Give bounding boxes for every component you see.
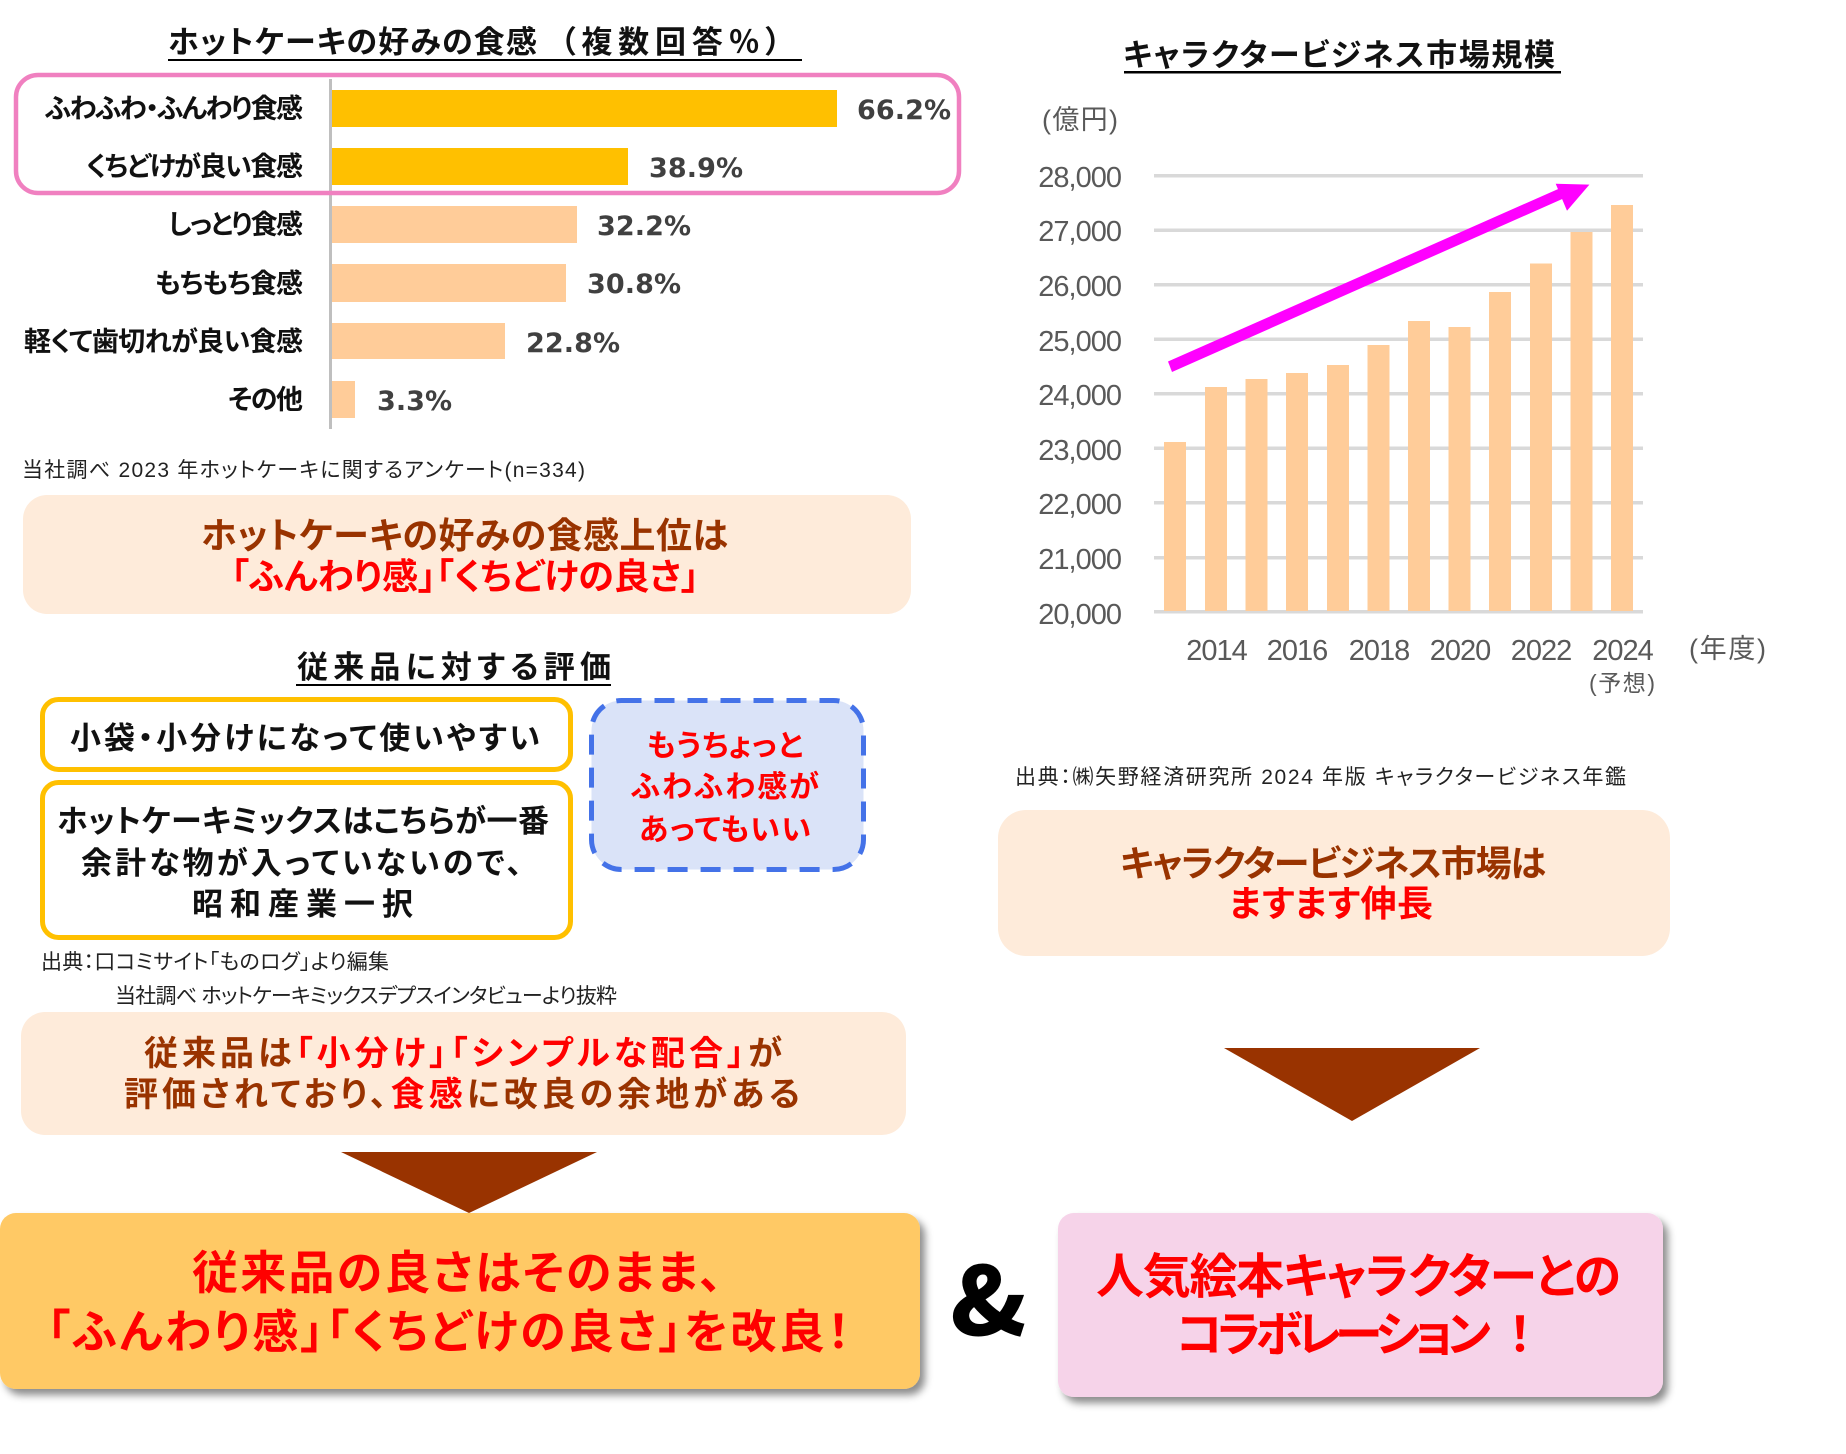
callout: top textures: 「ふんわり感」「くちどけの良さ」	[231, 556, 699, 597]
bar chart: market size by year: 22,000	[1038, 489, 1121, 521]
heading: texture preference	[168, 25, 802, 61]
bar chart: texture preference: 22.8%	[526, 328, 620, 359]
forecast note: (予想)	[1589, 670, 1655, 696]
dashed callout: want more fluffiness	[592, 700, 864, 870]
review box: simple ingredients	[42, 782, 570, 938]
bar chart: market size by year: 2020	[1430, 635, 1490, 667]
highlight frame: top two textures	[16, 75, 959, 193]
bar chart: market size by year: 20,000	[1038, 599, 1121, 631]
bar chart: texture preference: もちもち食感	[155, 269, 303, 299]
bar chart: market size by year: 2018	[1349, 635, 1409, 667]
bar chart: market size by year: 21,000	[1038, 544, 1121, 576]
ampersand: &	[951, 1227, 1025, 1361]
source note: survey: 当社調べ 2023 年ホットケーキに関するアンケート(n=334)	[22, 459, 585, 482]
callout: top textures: ホットケーキの好みの食感上位は	[201, 515, 728, 556]
bar chart: texture preference: 66.2%	[857, 95, 951, 126]
bar chart: market size by year: 2016	[1267, 635, 1327, 667]
bar chart: market size by year: 28,000	[1038, 162, 1121, 194]
bar chart: texture preference	[24, 79, 951, 429]
dashed callout: want more fluffiness: もうちょっと	[647, 730, 803, 763]
callout: market growing: ますます伸長	[1229, 883, 1433, 924]
y axis unit: (億円)	[1042, 105, 1118, 135]
callout: room for improvement: 評価されており、食感に改良の余地がある	[124, 1075, 800, 1114]
bar chart: texture preference: 38.9%	[649, 153, 743, 184]
bar chart: market size by year: 24,000	[1038, 380, 1121, 412]
conclusion box: character collaboration	[1058, 1213, 1663, 1397]
heading: texture preference: ホットケーキの好みの食感	[168, 25, 537, 60]
bar chart: texture preference: 30.8%	[587, 269, 681, 300]
bar chart: market size by year: 2014	[1186, 635, 1248, 667]
source note: reviews and interviews	[41, 951, 617, 1008]
callout: room for improvement: 従来品は「小分け」「シンプルな配合」が	[144, 1034, 782, 1073]
bar chart: market size by year: 27,000	[1038, 216, 1121, 248]
callout: top textures	[23, 495, 911, 614]
bar chart: market size by year: 26,000	[1038, 271, 1121, 303]
conclusion box: improve texture: 従来品の良さはそのまま、	[192, 1247, 722, 1299]
review box: simple ingredients: 昭和産業一択	[192, 887, 413, 922]
conclusion box: character collaboration: コラボレーション	[1176, 1309, 1491, 1362]
source note: reviews and interviews: 出典：口コミサイト「ものログ」より編集	[41, 951, 389, 974]
conclusion box: character collaboration: 人気絵本キャラクターとの	[1096, 1251, 1621, 1304]
callout: room for improvement	[21, 1012, 906, 1135]
dashed callout: want more fluffiness: あってもいい	[639, 814, 811, 847]
arrow: down left	[341, 1152, 597, 1213]
arrow: down right	[1224, 1048, 1480, 1121]
review box: simple ingredients: ホットケーキミックスはこちらが一番	[57, 804, 549, 839]
bar chart: texture preference: その他	[228, 385, 303, 415]
panel: evaluation of existing products	[0, 650, 920, 1389]
x axis unit: (年度)	[1689, 634, 1766, 664]
bar chart: texture preference: ふわふわ・ふんわり食感	[44, 94, 303, 124]
callout: market growing	[998, 810, 1670, 956]
conclusion box: improve texture: 「ふんわり感」「くちどけの良さ」を改良！	[47, 1306, 850, 1358]
source note: reviews and interviews: 当社調べ ホットケーキミックスデプスインタビューより抜粋	[115, 985, 617, 1008]
bar chart: texture preference: 3.3%	[377, 386, 452, 417]
panel: preferred texture chart	[16, 25, 959, 614]
bar chart: texture preference: 32.2%	[597, 211, 691, 242]
heading: market size: キャラクタービジネス市場規模	[1123, 38, 1555, 73]
bar chart: market size by year: 23,000	[1038, 435, 1121, 467]
bar chart: market size by year	[1038, 162, 1654, 667]
bar chart: texture preference: 軽くて歯切れが良い食感	[24, 326, 303, 357]
review box: simple ingredients: 余計な物が入っていないので、	[81, 846, 522, 881]
dashed callout: want more fluffiness: ふわふわ感が	[630, 770, 819, 804]
bar chart: market size by year: 25,000	[1038, 326, 1121, 358]
conclusion box: character collaboration: ！	[1508, 1309, 1532, 1362]
heading: evaluation: 従来品に対する評価	[297, 650, 611, 685]
review box: small portions: 小袋・小分けになって使いやすい	[70, 721, 540, 756]
review box: small portions	[42, 700, 570, 770]
bar chart: market size by year: 2022	[1511, 635, 1571, 667]
callout: market growing: キャラクタービジネス市場は	[1120, 843, 1546, 884]
bar chart: texture preference: くちどけが良い食感	[86, 151, 303, 182]
heading: texture preference: （複数回答％）	[560, 25, 781, 60]
conclusion box: improve texture	[0, 1213, 920, 1389]
source note: Yano Research: 出典：㈱矢野経済研究所 2024 年版 キャラクタービジネス年鑑	[1015, 766, 1626, 789]
arrow: upward trend	[1168, 184, 1589, 372]
bar chart: texture preference: しっとり食感	[168, 210, 303, 240]
bar chart: market size by year: 2024	[1592, 635, 1654, 667]
panel: character business market chart	[998, 38, 1766, 1397]
